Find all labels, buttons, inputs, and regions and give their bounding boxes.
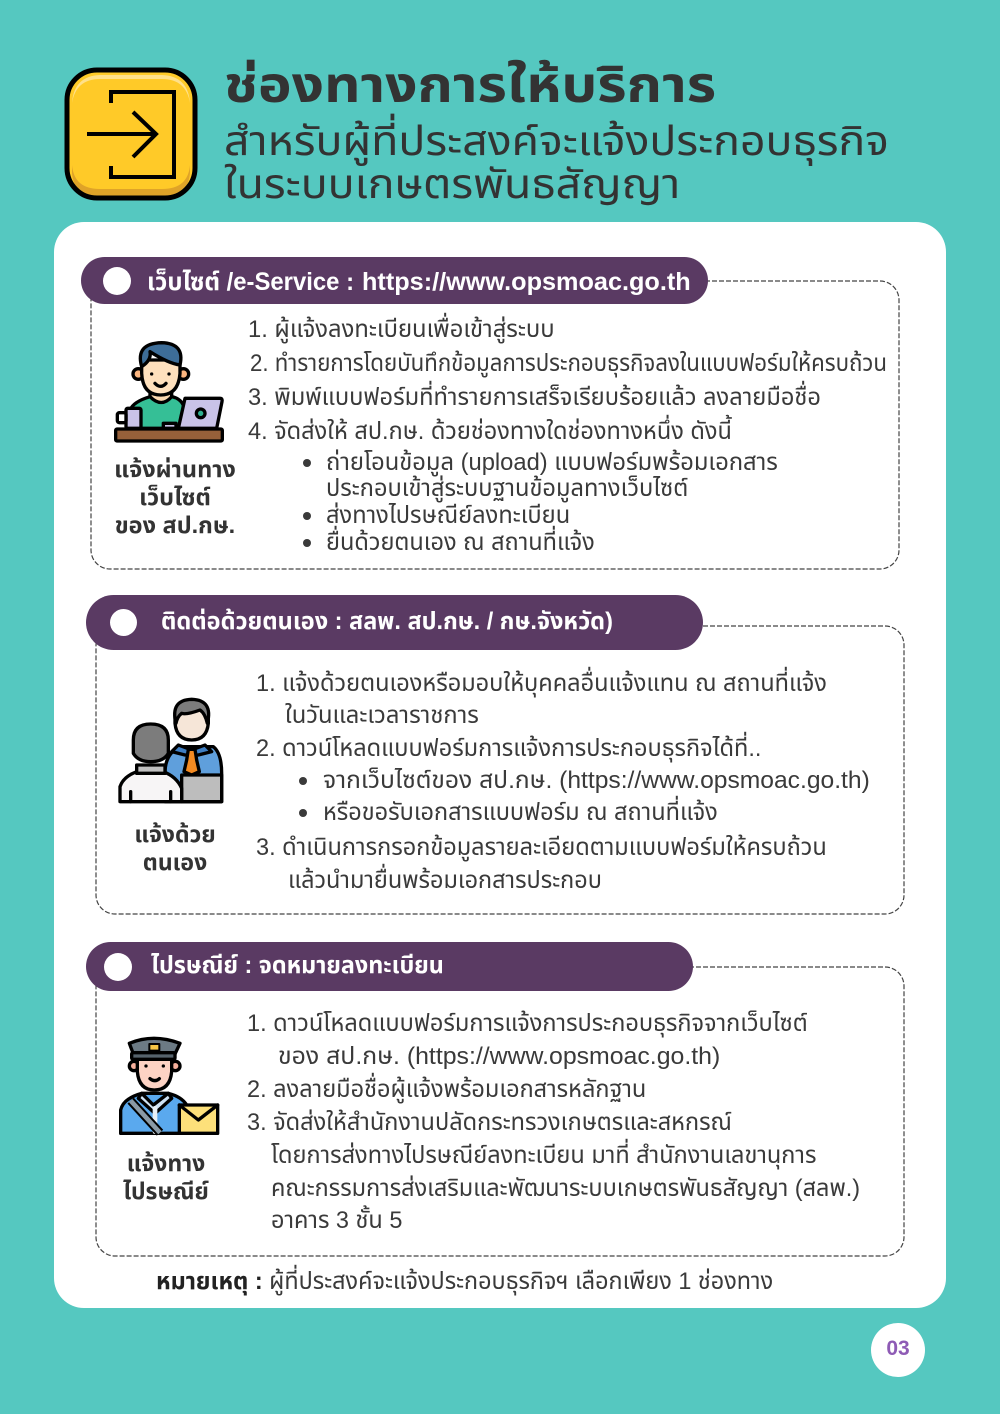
icon: two people meeting [118,698,224,804]
heading: postal channel [86,942,693,991]
label: in-person channel [134,821,216,875]
text: postal steps: 2. ลงลายมือชื่อผู้แจ้งพร้อมเอกสารหลักฐาน [247,1076,646,1103]
text: in-person steps: ในวันและเวลาราชการ [285,702,479,729]
label: website channel: แจ้งผ่านทาง [114,456,236,482]
label: website channel: เว็บไซต์ [139,484,211,510]
text: website steps [248,312,887,556]
page number: 03 [886,1337,910,1360]
heading: in-person channel: ติดต่อด้วยตนเอง : สลพ. สป.กษ. / กษ.จังหวัด) [161,608,613,635]
text: in-person steps: 2. ดาวน์โหลดแบบฟอร์มการแจ้งการประกอบธุรกิจได้ที่.. [256,735,761,762]
text: postal steps: โดยการส่งทางไปรษณีย์ลงทะเบียน มาที่ สำนักงานเลขานุการ [271,1142,816,1169]
text: postal steps: 1. ดาวน์โหลดแบบฟอร์มการแจ้งการประกอบธุรกิจจากเว็บไซต์ [247,1010,808,1037]
heading: website channel [81,257,708,304]
text: in-person steps [256,666,870,894]
panel: postal channel box [95,966,905,1257]
text: website steps: 3. พิมพ์แบบฟอร์มที่ทำรายการเสร็จเรียบร้อยแล้ว ลงลายมือชื่อ [248,384,821,411]
text: in-person steps: จากเว็บไซต์ของ สป.กษ. (https://www.opsmoac.go.th) [323,767,870,794]
label: website channel [114,456,236,538]
icon: postman with envelope [119,1036,220,1136]
page number [871,1323,925,1377]
subtitle [224,114,889,207]
panel: in-person channel box [95,625,905,915]
icon: exit arrow [64,68,198,200]
text: in-person steps: หรือขอรับเอกสารแบบฟอร์ม ณ สถานที่แจ้ง [323,799,718,826]
subtitle: ในระบบเกษตรพันธสัญญา [224,161,680,207]
panel: main white card [54,222,946,1308]
text: in-person steps: แล้วนำมายื่นพร้อมเอกสารประกอบ [288,867,602,894]
text: website steps: ส่งทางไปรษณีย์ลงทะเบียน [326,502,570,529]
label: postal channel [123,1150,209,1204]
text: website steps: 2. ทำรายการโดยบันทึกข้อมูลการประกอบธุรกิจลงในแบบฟอร์มให้ครบถ้วน [250,350,887,377]
heading: website channel: https://www.opsmoac.go.th [362,268,691,296]
label: website channel: ของ สป.กษ. [115,512,235,538]
text: website steps: ยื่นด้วยตนเอง ณ สถานที่แจ้ง [326,529,595,556]
text: in-person steps: 1. แจ้งด้วยตนเองหรือมอบให้บุคคลอื่นแจ้งแทน ณ สถานที่แจ้ง [256,670,827,697]
label: in-person channel: แจ้งด้วย [134,821,216,847]
text: postal steps: ของ สป.กษ. (https://www.opsmoac.go.th) [278,1043,720,1070]
text: postal steps: อาคาร 3 ชั้น 5 [271,1207,402,1234]
subtitle: สำหรับผู้ที่ประสงค์จะแจ้งประกอบธุรกิจ [224,118,889,164]
panel: website channel box [90,280,900,570]
note: หมายเหตุ : ผู้ที่ประสงค์จะแจ้งประกอบธุรกิจฯ เลือกเพียง 1 ช่องทาง [156,1268,773,1295]
text: website steps: 1. ผู้แจ้งลงทะเบียนเพื่อเข้าสู่ระบบ [248,316,555,343]
text: website steps: ประกอบเข้าสู่ระบบฐานข้อมูลทางเว็บไซต์ [326,475,688,502]
heading: postal channel: ไปรษณีย์ : จดหมายลงทะเบียน [151,952,444,979]
icon: person at laptop [114,341,224,443]
text: postal steps: คณะกรรมการส่งเสริมและพัฒนาระบบเกษตรพันธสัญญา (สลพ.) [271,1175,860,1202]
text: postal steps: 3. จัดส่งให้สำนักงานปลัดกระทรวงเกษตรและสหกรณ์ [247,1109,732,1136]
text: website steps: 4. จัดส่งให้ สป.กษ. ด้วยช่องทางใดช่องทางหนึ่ง ดังนี้ [248,418,732,445]
label: postal channel: แจ้งทาง [127,1150,205,1176]
heading: in-person channel [86,595,703,650]
title: ช่องทางการให้บริการ [224,57,716,113]
heading: website channel: เว็บไซต์ /e-Service : [147,268,354,296]
label: in-person channel: ตนเอง [143,849,207,875]
text: in-person steps: 3. ดำเนินการกรอกข้อมูลรายละเอียดตามแบบฟอร์มให้ครบถ้วน [256,834,827,861]
text: website steps: ถ่ายโอนข้อมูล (upload) แบบฟอร์มพร้อมเอกสาร [326,449,778,476]
label: postal channel: ไปรษณีย์ [123,1178,209,1204]
